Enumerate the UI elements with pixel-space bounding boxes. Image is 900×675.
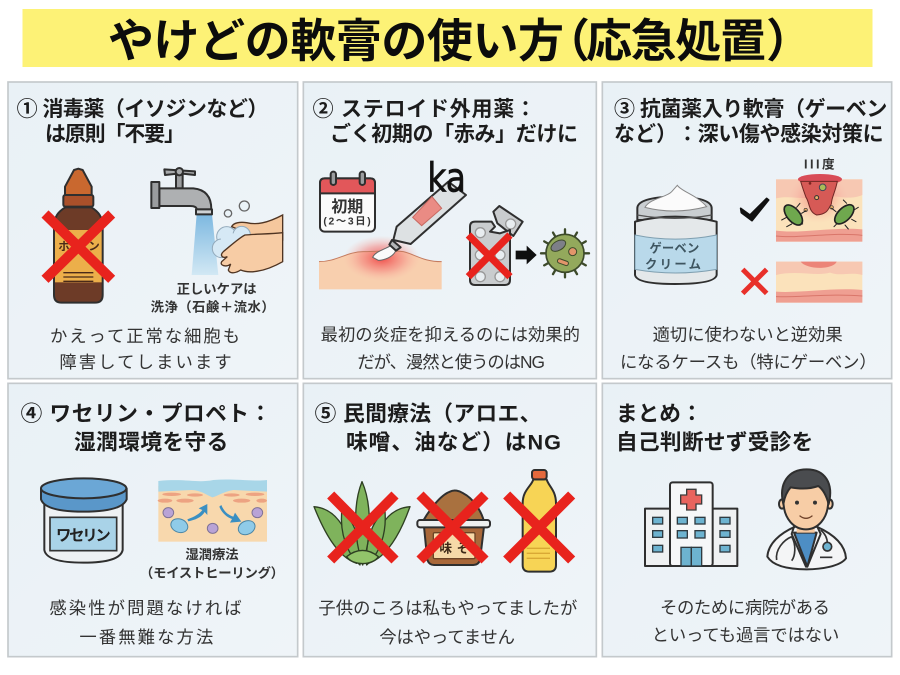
icon: shallow burn skin diagram — [776, 262, 862, 303]
panel 6 note: そのために病院がある — [660, 597, 830, 617]
icon: reddened skin — [319, 236, 442, 289]
panel 5 note — [318, 598, 577, 647]
panel 2 note: だが、漫然と使うのはNG — [357, 352, 545, 372]
icon: crossed-out aloe — [314, 482, 410, 565]
icon: calendar early stage: (2～3日) — [323, 215, 371, 227]
correct care caption: 洗浄（石鹸＋流水） — [151, 298, 275, 314]
icon: germ — [541, 229, 589, 277]
panel 2 heading — [313, 98, 578, 146]
icon: Geben cream jar: クリーム — [645, 258, 701, 272]
icon: Geben cream jar — [635, 185, 717, 284]
panel 5: folk remedies — [303, 383, 596, 657]
panel 3 heading — [614, 98, 887, 146]
panel 6 heading: 自己判断せず受診を — [616, 429, 813, 454]
moist healing caption: 湿潤療法 — [185, 546, 239, 562]
icon: washing hands with soap — [212, 201, 283, 273]
icon: doctor — [767, 469, 846, 569]
panel 3 heading: ③ 抗菌薬入り軟膏（ゲーベン — [614, 98, 887, 121]
panel 2 heading: ② ステロイド外用薬： — [313, 98, 536, 121]
icon: deep wound skin diagram — [776, 173, 862, 242]
panel 5 note: 子供のころは私もやってましたが — [318, 598, 577, 618]
correct care caption: 正しいケアは — [177, 282, 257, 297]
panel 6 heading — [616, 401, 813, 454]
icon: ointment tube — [373, 182, 466, 260]
title: ） — [766, 15, 812, 67]
panel 4 note: 一番無難な方法 — [79, 627, 213, 647]
icon: crossed-out antiseptic bottle: ン — [88, 241, 100, 253]
panel 1 note: 障害してしまいます — [59, 352, 232, 372]
icon: check mark — [741, 198, 769, 221]
icon: calendar early stage — [320, 172, 375, 232]
panel 4: petroleum jelly — [8, 383, 298, 657]
panel 3 note: 適切に使わないと逆効果 — [653, 325, 843, 345]
correct care caption — [151, 282, 275, 314]
moist healing caption: （モイストヒーリング） — [140, 564, 284, 580]
panel 4 heading: ④ ワセリン・プロペト： — [21, 401, 271, 426]
panel 1 note: かえって正常な細胞も — [50, 326, 240, 346]
panel 4 heading: 湿潤環境を守る — [74, 429, 228, 454]
icon: calendar early stage: 初期 — [331, 198, 363, 216]
icon: crossed-out miso — [417, 490, 490, 565]
icon: crossed-out antibiotic pills — [468, 206, 523, 285]
panel 3: antibiotic ointment — [602, 82, 892, 379]
panel 5 heading — [315, 401, 561, 454]
panel 5 note: 今はやってません — [379, 627, 515, 647]
panel 1 heading: は原則「不要」 — [45, 123, 185, 146]
title: 応急処置 — [586, 15, 766, 67]
panel 6 note — [652, 597, 839, 645]
panel 6 note: といっても過言ではない — [652, 625, 839, 645]
icon: crossed-out antiseptic bottle: ボ — [58, 240, 70, 253]
panel 2: steroid — [303, 82, 596, 379]
panel 2 heading: ごく初期の「赤み」だけに — [330, 122, 578, 146]
title: （ — [544, 15, 590, 67]
panel 3 heading: など） — [614, 123, 677, 146]
panel 3 note: になるケースも（特にゲーベン） — [620, 352, 877, 372]
icon: crossed-out antiseptic bottle — [45, 169, 112, 303]
panel 3 note — [620, 325, 877, 372]
icon: crossed-out oil bottle — [507, 470, 572, 572]
panel 3 heading: ：深い傷や感染対策に — [677, 122, 884, 146]
icon: vaseline jar: ワセリン — [56, 528, 111, 545]
panel 5 heading: 味噌、油など）はNG — [346, 429, 561, 454]
panel 2 note: 最初の炎症を抑えるのには効果的 — [321, 325, 580, 345]
moist healing caption — [140, 546, 284, 580]
panel 6: summary — [602, 383, 892, 657]
icon: hospital — [645, 482, 737, 566]
panel 5 heading: ⑤ 民間療法（アロエ、 — [315, 401, 541, 426]
title: やけどの軟膏の使い方 — [108, 15, 564, 67]
handwritten ka: ka — [427, 156, 466, 202]
icon: Geben cream jar: ゲーベン — [649, 241, 699, 256]
arrow — [516, 246, 537, 264]
icon: red cross — [743, 269, 767, 293]
panel 1 heading: ① 消毒薬（イソジンなど） — [17, 98, 268, 121]
panel 4 heading — [21, 401, 271, 454]
panel 4 note: 感染性が問題なければ — [49, 598, 242, 618]
icon: moist healing diagram — [158, 480, 267, 542]
panel 6 heading: まとめ： — [616, 401, 703, 426]
panel 1: disinfectant — [8, 82, 298, 379]
degree III label: III度 — [804, 156, 835, 171]
panel 1 note — [50, 326, 240, 372]
icon: faucet with running water — [151, 168, 218, 275]
panel 2 note — [321, 325, 580, 372]
icon: crossed-out miso: 味そ — [439, 542, 469, 556]
title — [22, 9, 872, 67]
icon: vaseline jar — [41, 478, 127, 563]
panel 1 heading — [17, 98, 268, 146]
panel 4 note — [49, 598, 242, 647]
